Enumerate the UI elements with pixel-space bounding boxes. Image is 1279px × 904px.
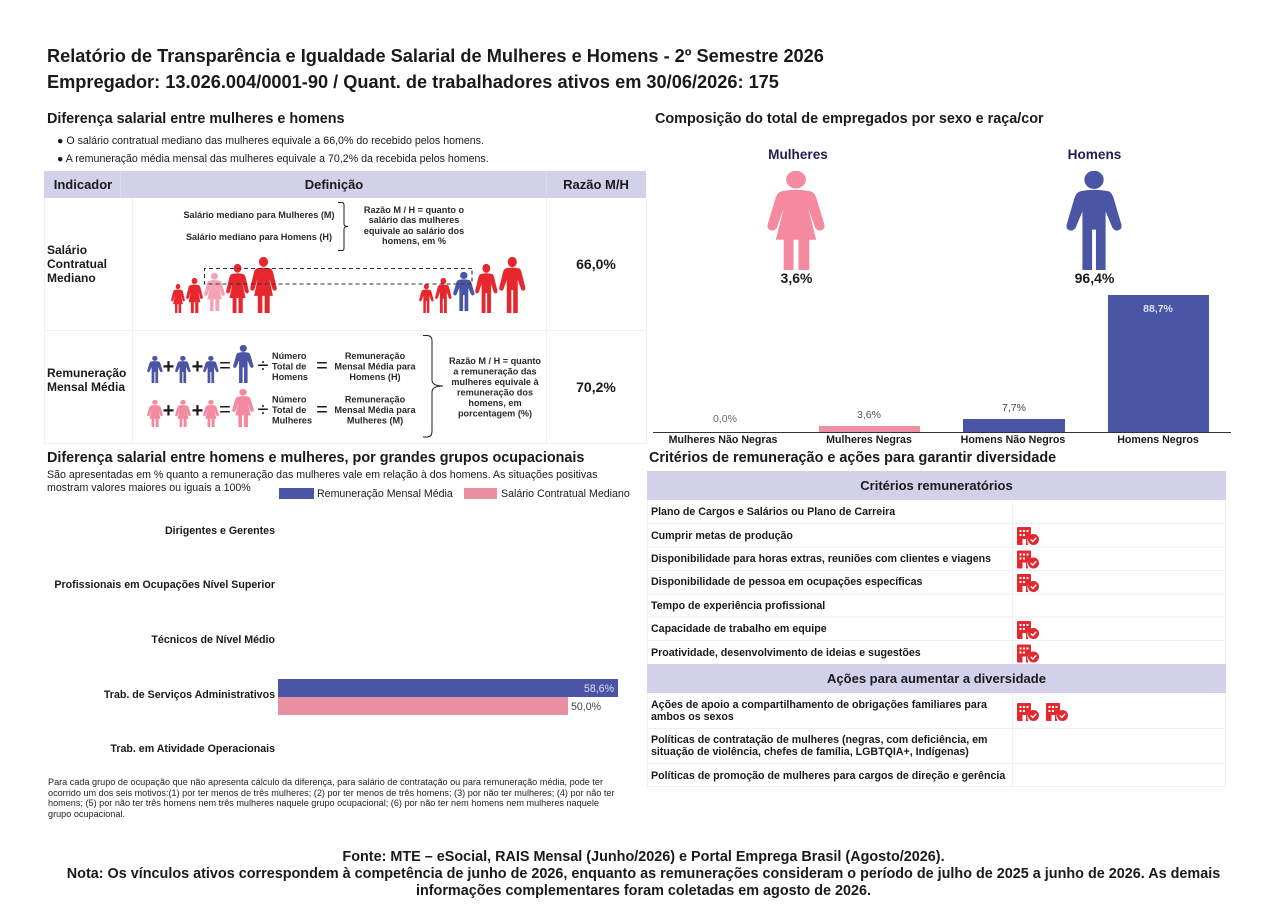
header: critérios remuneratórios (647, 471, 1226, 500)
equation: mulheres: + (163, 400, 174, 422)
list: ações (651, 699, 1005, 782)
bar chart: composição por raça/cor: Mulheres Negras (826, 434, 912, 446)
equation: homens: Remuneração (345, 351, 406, 361)
equation: mulheres: Total de (272, 405, 306, 415)
header: ações (647, 664, 1226, 693)
definition text: razão salário: Razão M / H = quanto o (364, 205, 464, 215)
bar chart: grupos ocupacionais (54, 525, 618, 755)
text block: fonte e nota: Fonte: MTE – eSocial, RAIS Mensal (Junho/2026) e Portal Emprega Brasil (Agosto/2026). (342, 849, 945, 865)
table header (54, 177, 629, 192)
text block: explicação: mostram valores maiores ou iguais a 100% (47, 482, 251, 494)
definition text: razão remuneração: homens, em (468, 398, 522, 408)
bar chart: grupos ocupacionais: 58,6% (584, 683, 615, 695)
legend: Salário Contratual Mediano (501, 488, 630, 500)
list: ações: ambos os sexos (651, 711, 734, 723)
table header: Razão M/H (563, 177, 629, 192)
list: critérios: Proatividade, desenvolvimento de ideias e sugestões (651, 647, 921, 659)
bar chart: composição por raça/cor (653, 295, 1231, 446)
panel: tabela de indicadores (44, 171, 646, 444)
icons: ações adotadas (1017, 703, 1068, 721)
icon: mulheres (767, 147, 828, 286)
equation: homens: + (192, 356, 203, 378)
icon: homens: Homens (1068, 147, 1121, 162)
equation: homens: = (219, 355, 231, 377)
definition text: razão salário: salário das mulheres (369, 215, 459, 225)
definition text: razão salário: homens, em % (382, 236, 446, 246)
bar chart: grupos ocupacionais: 50,0% (571, 701, 602, 713)
legend: Remuneração Mensal Média (317, 488, 453, 500)
equation: homens (147, 345, 416, 383)
text block: explicação (47, 469, 597, 494)
text block: fonte e nota (67, 849, 1220, 899)
bar chart: composição por raça/cor: 0,0% (713, 413, 737, 425)
icons: critérios adotados (1017, 527, 1039, 662)
equation: mulheres: Mensal Média para (334, 405, 416, 415)
row label: remuneração mensal média: Mensal Média (47, 380, 125, 394)
equation: homens: Número (272, 351, 307, 361)
text block: fonte e nota: Nota: Os vínculos ativos correspondem à competência de junho de 2026, enquanto as remunerações consideram o período de julho de 2025 a junho de 2026. As demais (67, 866, 1220, 882)
list: critérios: Tempo de experiência profissional (651, 600, 825, 612)
title: Empregador: 13.026.004/0001-90 / Quant. de trabalhadores ativos em 30/06/2026: 175 (47, 72, 779, 92)
text block: nota de rodapé (48, 777, 615, 819)
list: critérios: Disponibilidade de pessoa em ocupações específicas (651, 576, 923, 588)
bar chart: grupos ocupacionais: Trab. de Serviços Administrativos (104, 689, 275, 701)
definition text: razão remuneração: remuneração dos (457, 388, 533, 398)
equation: mulheres: Número (272, 394, 307, 404)
equation: homens: Total de (272, 362, 306, 372)
equation: homens: Homens (272, 372, 308, 382)
row label: salário contratual mediano: Mediano (47, 271, 96, 285)
equation: mulheres: = (219, 399, 231, 421)
icon: homens: 96,4% (1075, 270, 1115, 286)
bar chart: composição por raça/cor: Mulheres Não Negras (669, 434, 777, 446)
equation: mulheres: Remuneração (345, 394, 406, 404)
icon: homens (1066, 147, 1122, 286)
bar chart: composição por raça/cor: 3,6% (857, 409, 881, 421)
row label: remuneração mensal média: Remuneração (47, 366, 126, 380)
panel: critérios e ações (647, 471, 1226, 786)
icons: grupo de homens (419, 257, 525, 313)
text block: resumo: ● A remuneração média mensal das mulheres equivale a 70,2% da recebida pelos homens. (57, 153, 489, 165)
dashed median connector (204, 268, 472, 284)
heading: critérios: Critérios de remuneração e ações para garantir diversidade (649, 450, 1056, 466)
text block: resumo: ● O salário contratual mediano das mulheres equivale a 66,0% do recebido pelos homens. (57, 135, 484, 147)
equation: mulheres (147, 389, 416, 427)
text block: nota de rodapé: ocorrido um dos seis motivos:(1) por ter menos de três mulheres; (2) por ter menos de três homens; (3) por não ter mulheres; (4) por não ter (48, 788, 615, 798)
panel: composição por sexo (767, 147, 1122, 286)
equation: homens: ÷ (258, 355, 269, 377)
bar chart: grupos ocupacionais: Dirigentes e Gerentes (165, 525, 275, 537)
list: critérios: Plano de Cargos e Salários ou Plano de Carreira (651, 506, 895, 518)
bar chart: composição por raça/cor: Homens Negros (1117, 434, 1199, 446)
definition text: salário mediano (183, 210, 335, 242)
definition text: razão salário (364, 205, 464, 246)
heading: composição: Composição do total de empregados por sexo e raça/cor (655, 111, 1044, 127)
text block: explicação: São apresentadas em % quanto a remuneração das mulheres vale em relação à dos homens. As situações positivas (47, 469, 597, 481)
row label: salário contratual mediano: Contratual (47, 257, 107, 271)
text block: nota de rodapé: homens; (5) por não ter três homens nem três mulheres naquele grupo ocupacional; (6) por não ter nem homens nem mulheres naquele (48, 798, 599, 808)
value: 66,0%: 66,0% (576, 256, 616, 272)
table header: Definição (305, 177, 363, 192)
icon: mulheres: Mulheres (768, 147, 828, 162)
definition text: razão remuneração: mulheres equivale à (451, 377, 540, 387)
brace: remuneração (423, 336, 443, 437)
equation: homens: Homens (H) (349, 372, 401, 382)
equation: mulheres: Mulheres (M) (347, 416, 403, 426)
list: critérios: Cumprir metas de produção (651, 530, 793, 542)
list: ações: Ações de apoio a compartilhamento de obrigações familiares para (651, 699, 987, 711)
table header: Indicador (54, 177, 112, 192)
legend (279, 488, 630, 500)
row label: remuneração mensal média (47, 366, 126, 394)
heading: diferença salarial: Diferença salarial entre mulheres e homens (47, 111, 345, 127)
definition text: razão remuneração: porcentagem (%) (458, 408, 532, 418)
list: critérios (651, 506, 991, 659)
icon: mulheres: 3,6% (781, 270, 813, 286)
value: 70,2%: 70,2% (576, 379, 616, 395)
bar chart: grupos ocupacionais: Trab. em Atividade Operacionais (110, 743, 275, 755)
list: ações: Políticas de contratação de mulheres (negras, com deficiência, em (651, 734, 987, 746)
header: critérios remuneratórios: Critérios remuneratórios (860, 478, 1013, 493)
definition text: razão salário: equivale ao salário dos (364, 226, 464, 236)
bar chart: composição por raça/cor: Homens Não Negros (961, 434, 1065, 446)
bar chart: grupos ocupacionais: Técnicos de Nível Médio (151, 634, 275, 646)
title: Relatório de Transparência e Igualdade Salarial de Mulheres e Homens - 2º Semestre 2026 (47, 46, 824, 66)
bar chart: composição por raça/cor: 7,7% (1002, 402, 1026, 414)
header: ações: Ações para aumentar a diversidade (827, 671, 1046, 686)
list: critérios: Capacidade de trabalho em equipe (651, 623, 827, 635)
definition text: salário mediano: Salário mediano para Mulheres (M) (183, 210, 335, 220)
row label: salário contratual mediano: Salário (47, 243, 87, 257)
bar chart: grupos ocupacionais: Profissionais em Ocupações Nível Superior (54, 579, 275, 591)
definition text: razão remuneração (449, 356, 541, 418)
text block: nota de rodapé: Para cada grupo de ocupação que não apresenta cálculo da diferença, para salário de contratação ou para remuneração média, pode ter (48, 777, 603, 787)
text block: fonte e nota: informações complementares foram coletadas em agosto de 2026. (416, 883, 871, 899)
equation: mulheres: = (316, 399, 328, 421)
list: critérios: Disponibilidade para horas extras, reuniões com clientes e viagens (651, 553, 991, 565)
heading: grandes grupos ocupacionais: Diferença salarial entre homens e mulheres, por grandes grupos ocupacionais (47, 450, 584, 466)
definition text: razão remuneração: Razão M / H = quanto (449, 356, 541, 366)
equation: mulheres: Mulheres (272, 416, 312, 426)
equation: homens: = (316, 355, 328, 377)
title (47, 46, 824, 92)
equation: homens: Mensal Média para (334, 362, 416, 372)
definition text: razão remuneração: a remuneração das (453, 366, 537, 376)
bar chart: composição por raça/cor: 88,7% (1143, 303, 1174, 315)
list: ações: Políticas de promoção de mulheres para cargos de direção e gerência (651, 770, 1005, 782)
equation: mulheres: + (192, 400, 203, 422)
equation: homens: + (163, 356, 174, 378)
brace: salário mediano (338, 202, 348, 250)
list: ações: situação de violência, chefes de família, LGBTQIA+, Indígenas) (651, 746, 969, 758)
text block: nota de rodapé: grupo ocupacional. (48, 809, 125, 819)
text block: resumo (57, 135, 489, 165)
equation: mulheres: ÷ (258, 399, 269, 421)
definition text: salário mediano: Salário mediano para Homens (H) (186, 232, 332, 242)
row label: salário contratual mediano (47, 243, 107, 285)
icons: grupo de mulheres (171, 257, 277, 313)
